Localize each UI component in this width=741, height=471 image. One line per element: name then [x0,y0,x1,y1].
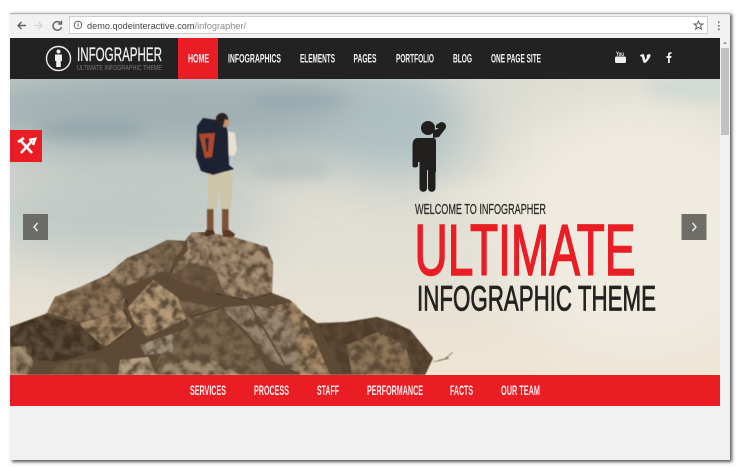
logo text [77,45,162,72]
logo icon [46,46,70,70]
red section menu bar: STAFF [317,382,339,398]
icon: crossed hammer and wrench [18,138,35,153]
boots [204,229,215,237]
welcome line: WELCOME TO INFOGRAPHER [415,201,546,218]
icon: vimeo [640,54,651,63]
slider arrow left [23,214,48,240]
navigation: PAGES [354,52,376,66]
icon: youtube [615,51,626,63]
icon: youtube: You [616,51,624,58]
head and hat [216,113,228,125]
navigation: ONE PAGE SITE [491,52,541,66]
address bar [70,16,708,34]
mid ground [150,300,270,375]
scrollbar [720,38,730,460]
navigation [188,52,541,66]
tools widget button [10,130,42,162]
lower right grey rock [220,305,300,373]
icon: info [74,21,82,29]
shorts [207,172,233,209]
active nav item [178,38,218,79]
site header [10,38,720,79]
backpack [196,118,234,175]
red section menu bar: FACTS [450,382,473,398]
foreground rocks [10,346,34,375]
browser toolbar [10,13,730,38]
red section menu bar: OUR TEAM [501,382,540,398]
icon: forward arrow [34,22,42,29]
logo text: ULTIMATE INFOGRAPHIC THEME [77,65,162,72]
url text: demo.qodeinteractive.com/infographer/ [87,21,246,32]
small branch [433,352,453,362]
red section menu bar [10,375,720,406]
red section menu bar: PERFORMANCE [367,382,423,398]
cracks [107,253,285,365]
central boulder [128,280,190,337]
icon: facebook [666,52,672,63]
hero text [414,201,656,318]
lower left rock [80,310,132,347]
rock formation [10,232,453,375]
navigation: HOME [188,52,209,66]
second boulder [148,240,183,273]
icon: thinking figure [412,121,446,192]
right rock [317,317,433,375]
top boulder [170,232,273,300]
red section menu bar: SERVICES [190,382,226,398]
hero slider [0,60,741,375]
slider arrow right [682,214,706,240]
left big rock [47,275,125,322]
icon: reload [53,21,62,30]
third boulder [107,253,163,287]
sky photo background [0,60,741,375]
red section menu bar: PROCESS [254,382,289,398]
shirt [227,131,237,156]
navigation: ELEMENTS [300,52,335,66]
logo text: INFOGRAPHER [77,45,162,66]
navigation: BLOG [453,52,472,66]
navigation: PORTFOLIO [396,52,434,66]
navigation: INFOGRAPHICS [228,52,281,66]
icon: menu dots [718,22,720,30]
hiker with backpack [196,113,237,237]
icon: back arrow [18,22,26,29]
icon: star [694,21,703,29]
dark left ground [10,315,105,362]
calves [207,209,214,230]
